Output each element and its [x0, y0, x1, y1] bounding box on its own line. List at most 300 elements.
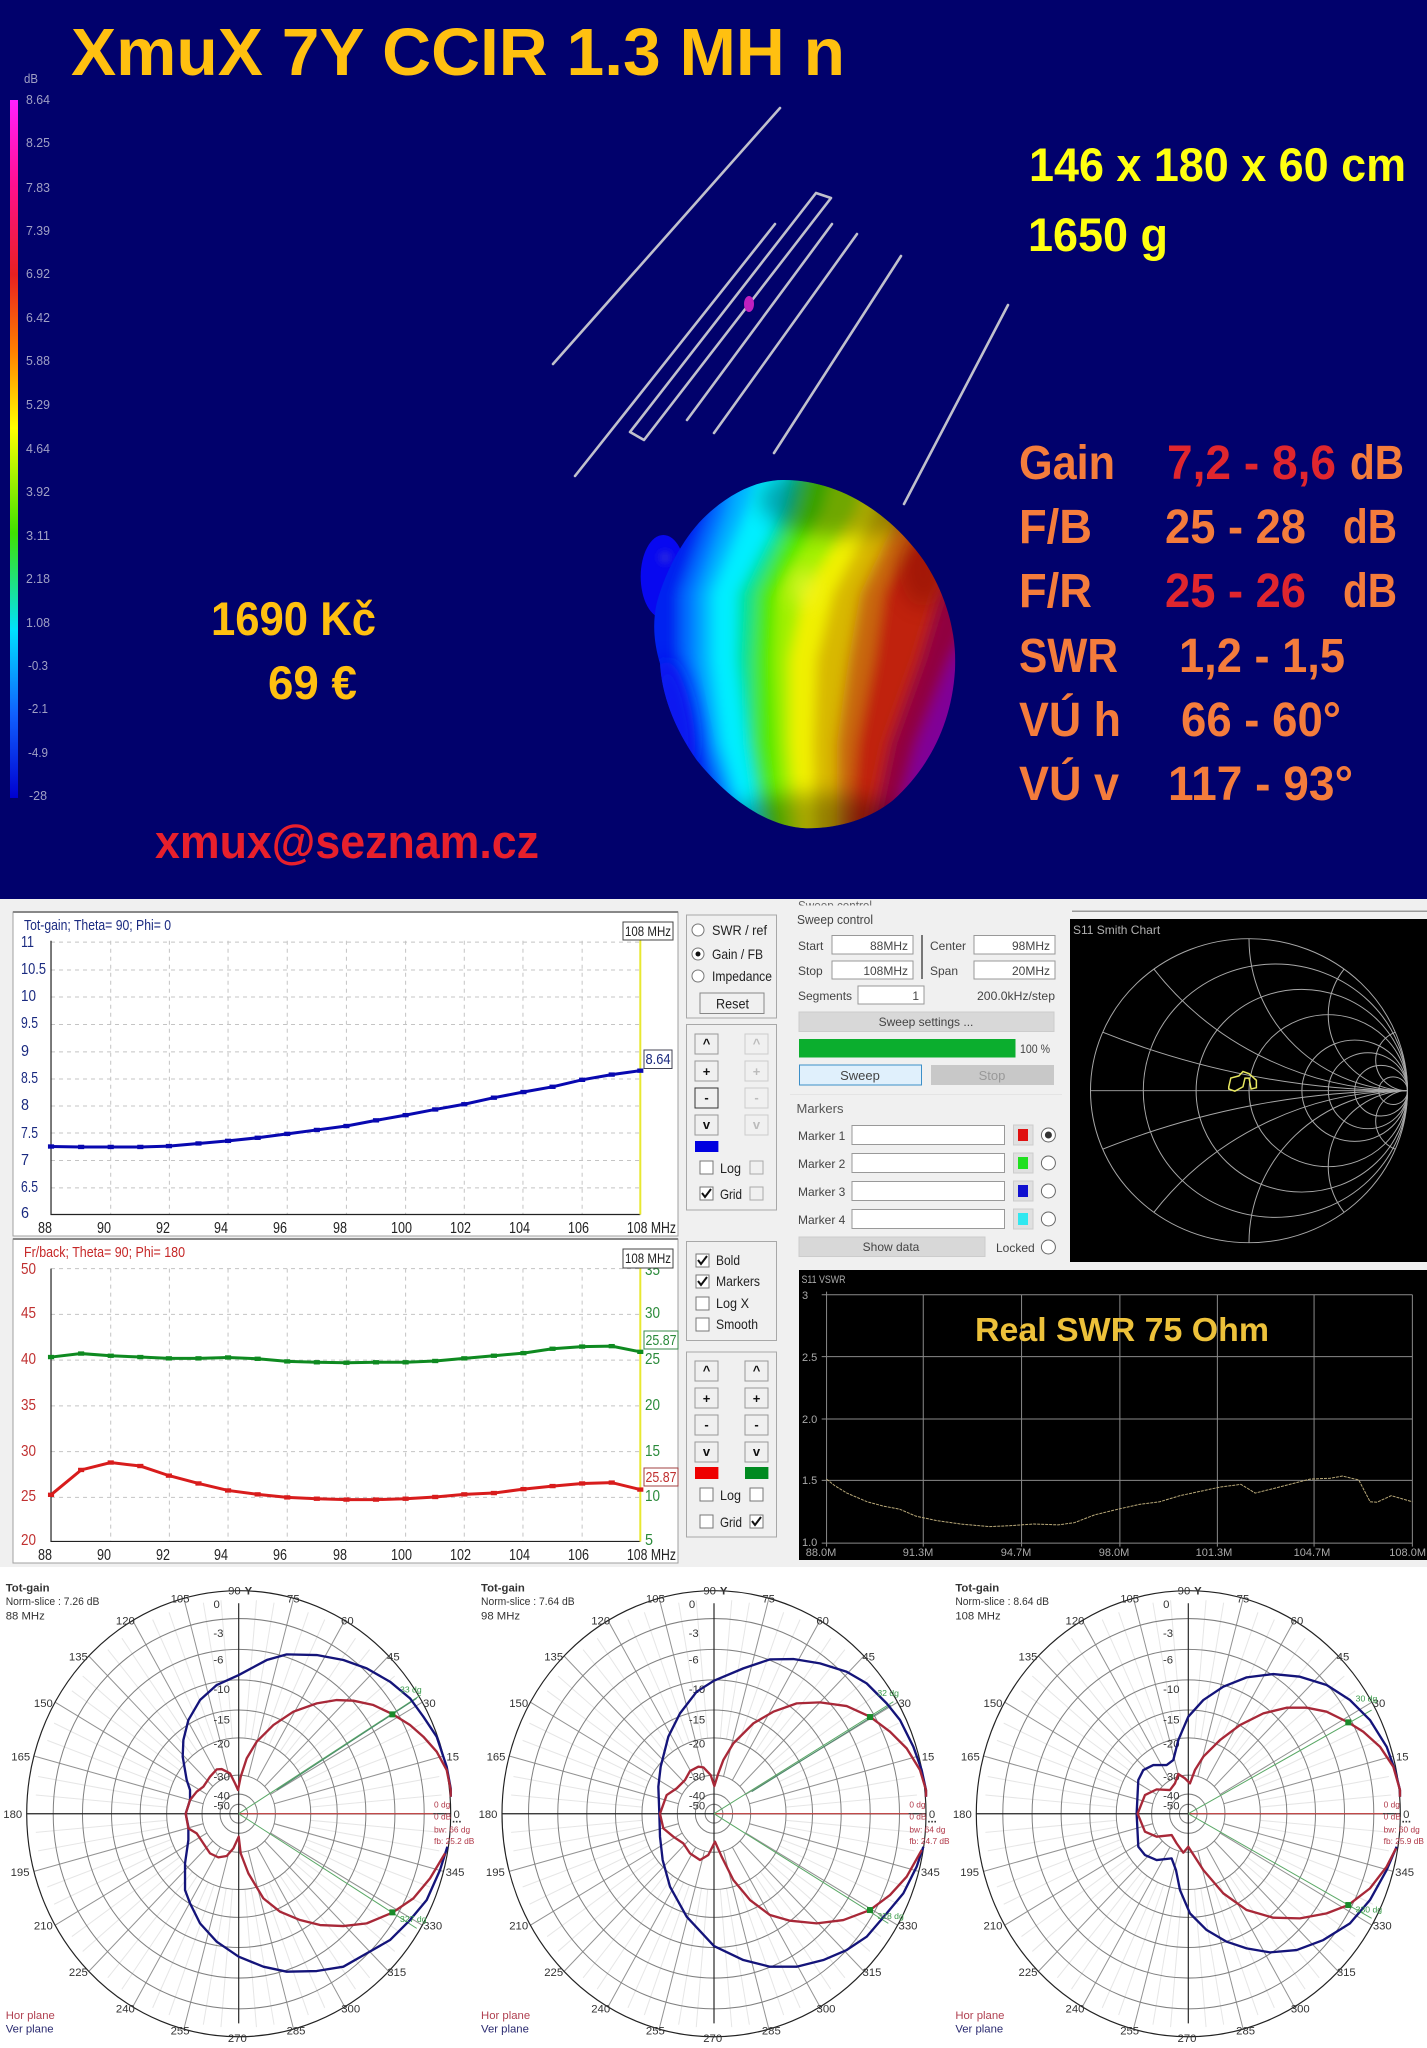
- polar angle and dB labels: Y: [1194, 1586, 1202, 1598]
- polar header: [955, 1582, 1049, 1622]
- polar angle and dB labels: 225: [544, 1967, 563, 1979]
- front/back axis labels: 25: [645, 1351, 660, 1368]
- stop button: Stop: [979, 1068, 1005, 1083]
- panel: chart mode selector: SWR / ref: [712, 922, 767, 938]
- polar angle and dB labels: 180: [3, 1809, 22, 1821]
- polar angle and dB labels: 90: [1178, 1586, 1190, 1598]
- polar angle and dB labels: -30: [214, 1771, 230, 1783]
- markers list: Marker 2: [798, 1157, 846, 1171]
- polar angle and dB labels: [953, 1586, 1414, 2045]
- polar angle and dB labels: 180: [953, 1809, 972, 1821]
- polar header: Norm-slice : 7.64 dB: [481, 1596, 575, 1608]
- polar readouts: 327 dg: [400, 1914, 427, 1924]
- show data button: [799, 1237, 985, 1256]
- polar legend: Hor plane: [6, 2010, 55, 2022]
- polar angle and dB labels: 315: [1337, 1967, 1356, 1979]
- polar angle and dB labels: 195: [960, 1867, 979, 1879]
- polar grid: [976, 1591, 1400, 2037]
- sweep range inputs: 88MHz: [870, 939, 908, 953]
- polar angle and dB labels: 345: [446, 1867, 464, 1879]
- polar header: Tot-gain: [955, 1582, 999, 1594]
- panel: plot options: Smooth: [716, 1316, 758, 1332]
- progress bar: 100 %: [1020, 1042, 1050, 1056]
- polar readouts: 0 dB: [434, 1812, 452, 1822]
- panel: polar plot 108 MHz: [953, 1582, 1424, 2045]
- polar angle and dB labels: 120: [116, 1616, 135, 1628]
- contact email: xmux@seznam.cz: [155, 815, 539, 868]
- stop button: [931, 1065, 1054, 1085]
- markers list: [790, 1094, 1062, 1229]
- panel: Smith chart: [1070, 910, 1427, 1262]
- sweep range inputs: 108MHz: [863, 964, 908, 978]
- gain title: Tot-gain; Theta= 90; Phi= 0: [24, 917, 171, 934]
- polar grid: [502, 1591, 926, 2037]
- specification table: dB: [1343, 501, 1397, 554]
- polar angle and dB labels: 330: [1373, 1921, 1392, 1933]
- polar header: 98 MHz: [481, 1610, 520, 1622]
- Smith reflection trace: [1229, 1072, 1256, 1091]
- gain axis labels: 88: [38, 1220, 52, 1237]
- polar header: Norm-slice : 8.64 dB: [955, 1596, 1049, 1608]
- polar angle and dB labels: 270: [1178, 2033, 1196, 2045]
- colour scale legend: 2.18: [26, 571, 50, 586]
- polar angle and dB labels: -3: [1163, 1628, 1173, 1640]
- polar pattern curves: [183, 1654, 451, 1972]
- title: XmuX 7Y CCIR 1.3 MH n: [71, 15, 845, 90]
- panel: plot options: [686, 1242, 776, 1340]
- gain line chart: [51, 940, 640, 1215]
- polar readouts: 0 dB: [1384, 1812, 1401, 1822]
- polar header: [481, 1582, 575, 1622]
- panel: VSWR chart: [799, 1270, 1427, 1560]
- polar readouts: bw: 64 dg: [909, 1824, 946, 1834]
- polar angle and dB labels: 315: [387, 1967, 406, 1979]
- panel: gain axis controls: Grid: [720, 1186, 742, 1202]
- polar angle and dB labels: 240: [116, 2003, 135, 2015]
- panel: front/back axis controls: v: [703, 1444, 711, 1459]
- polar angle and dB labels: 60: [1291, 1616, 1303, 1628]
- panel: chart mode selector: Gain / FB: [712, 946, 763, 962]
- feed point marker: [744, 296, 754, 312]
- front/back green value label: 25.87: [646, 1332, 676, 1349]
- polar readouts: ...: [1402, 1813, 1411, 1825]
- panel: polar plot 98 MHz: [479, 1582, 950, 2045]
- colour scale legend: 7.39: [26, 223, 50, 238]
- gain axis labels: 90: [97, 1220, 111, 1237]
- polar angle and dB labels: 120: [1066, 1616, 1084, 1628]
- sweep range inputs: Start: [798, 939, 824, 953]
- polar angle and dB labels: 75: [287, 1594, 300, 1606]
- polar angle and dB labels: 165: [11, 1751, 30, 1763]
- colour scale legend: 4.64: [26, 441, 50, 456]
- polar angle and dB labels: 165: [961, 1751, 980, 1763]
- markers list: Markers: [796, 1101, 844, 1116]
- front/back axis labels: 98: [333, 1547, 347, 1564]
- gain axis labels: 108 MHz: [627, 1220, 676, 1237]
- polar readouts: 33 dg: [400, 1685, 422, 1695]
- polar readouts: [400, 1685, 475, 1924]
- VSWR axis labels: 104.7M: [1294, 1547, 1330, 1559]
- sweep range inputs: 1: [912, 989, 919, 1003]
- gain axis labels: 96: [273, 1220, 287, 1237]
- front/back axis labels: 92: [156, 1547, 170, 1564]
- colour scale legend: 6.42: [26, 310, 50, 325]
- polar readouts: 30 dg: [1356, 1694, 1377, 1704]
- polar angle and dB labels: 270: [703, 2033, 722, 2045]
- panel: gain axis controls: -: [754, 1090, 759, 1105]
- polar angle and dB labels: 30: [898, 1698, 911, 1710]
- panel: front/back axis controls: +: [703, 1391, 711, 1406]
- polar angle and dB labels: 0: [1163, 1599, 1169, 1611]
- gain axis labels: 6.5: [21, 1179, 38, 1196]
- gain axis labels: 10.5: [21, 961, 46, 978]
- polar angle and dB labels: 300: [817, 2003, 835, 2015]
- specification table: 25 - 26: [1165, 565, 1306, 618]
- specification table: SWR: [1019, 630, 1118, 683]
- polar legend: Ver plane: [955, 2024, 1003, 2036]
- polar angle and dB labels: 45: [1337, 1651, 1349, 1663]
- polar angle and dB labels: 0: [1403, 1809, 1409, 1821]
- VSWR axis labels: 108.0M: [1389, 1547, 1426, 1559]
- front/back axis labels: 30: [645, 1305, 660, 1322]
- front/back axis labels: 94: [214, 1547, 228, 1564]
- gain axis labels: 7.5: [21, 1125, 38, 1142]
- VSWR axis labels: 88.0M: [806, 1547, 836, 1559]
- price: [211, 592, 376, 709]
- colour scale legend: [10, 71, 50, 803]
- polar angle and dB labels: 0: [454, 1809, 460, 1821]
- colour scale legend: 3.11: [26, 528, 50, 543]
- polar angle and dB labels: 0: [214, 1599, 220, 1611]
- polar angle and dB labels: -50: [1163, 1801, 1179, 1813]
- colour scale legend: -4.9: [28, 745, 48, 760]
- colour scale legend: 5.29: [26, 397, 50, 412]
- front/back axis labels: 90: [97, 1547, 111, 1564]
- dimensions and weight: 1650 g: [1028, 208, 1168, 261]
- gain axis labels: 92: [156, 1220, 170, 1237]
- polar angle and dB labels: 105: [646, 1594, 665, 1606]
- front/back axis labels: 30: [21, 1443, 36, 1460]
- specification table: Gain: [1019, 437, 1115, 490]
- polar header: 108 MHz: [955, 1610, 1001, 1622]
- gain axis labels: 102: [450, 1220, 471, 1237]
- front/back axis labels: 35: [21, 1397, 36, 1414]
- colour scale legend: -28: [29, 788, 47, 803]
- polar angle and dB labels: 105: [1120, 1594, 1139, 1606]
- gain axis labels: 7: [21, 1152, 29, 1169]
- specification table: 66 - 60°: [1181, 694, 1341, 747]
- markers list: Marker 4: [798, 1213, 846, 1227]
- Smith grid: [1090, 939, 1408, 1243]
- polar angle and dB labels: [479, 1586, 940, 2045]
- front/back axis labels: 106: [568, 1547, 589, 1564]
- polar angle and dB labels: 165: [487, 1751, 505, 1763]
- polar angle and dB labels: 15: [1396, 1751, 1409, 1763]
- front/back axis labels: 108 MHz: [627, 1547, 676, 1564]
- polar angle and dB labels: 150: [509, 1698, 528, 1710]
- locked toggle: [996, 1240, 1055, 1255]
- sweep range inputs: Span: [930, 964, 958, 978]
- panel: front/back axis controls: [686, 1352, 776, 1537]
- sweep heading: Sweep control: [797, 912, 873, 927]
- polar angle and dB labels: 135: [69, 1651, 88, 1663]
- specification table: 1,2 - 1,5: [1179, 630, 1345, 683]
- polar legend: Hor plane: [481, 2010, 530, 2022]
- markers list: Marker 1: [798, 1129, 846, 1143]
- polar angle and dB labels: 210: [509, 1921, 528, 1933]
- polar angle and dB labels: 255: [646, 2025, 665, 2037]
- panel: front/back axis controls: ^: [753, 1363, 761, 1378]
- polar angle and dB labels: -10: [214, 1684, 230, 1696]
- specification table: VÚ h: [1019, 692, 1121, 747]
- panel: gain axis controls: ^: [703, 1036, 711, 1051]
- polar angle and dB labels: 30: [423, 1698, 436, 1710]
- panel: sweep control: Sweep control: [798, 898, 872, 913]
- specification table: 25 - 28: [1165, 501, 1306, 554]
- panel: gain axis controls: Log: [720, 1160, 741, 1176]
- VSWR axis labels: 1.0: [802, 1537, 817, 1549]
- polar angle and dB labels: -30: [1163, 1771, 1179, 1783]
- gain axis labels: 8.5: [21, 1070, 38, 1087]
- polar readouts: 0 dB: [909, 1812, 927, 1822]
- polar readouts: [1356, 1694, 1424, 1914]
- gain axis labels: 6: [21, 1205, 29, 1222]
- front/back axis labels: 88: [38, 1547, 52, 1564]
- sweep range inputs: Center: [930, 939, 966, 953]
- colour scale legend: 5.88: [26, 353, 50, 368]
- panel: gain axis controls: [686, 1024, 776, 1210]
- polar angle and dB labels: -15: [214, 1715, 230, 1727]
- panel: front/back axis controls: Grid: [720, 1514, 742, 1530]
- polar angle and dB labels: 0: [929, 1809, 935, 1821]
- front/back axis labels: 50: [21, 1261, 36, 1278]
- polar angle and dB labels: 15: [922, 1751, 934, 1763]
- polar angle and dB labels: 135: [544, 1651, 563, 1663]
- colour scale legend: dB: [24, 71, 38, 86]
- sweep range inputs: 20MHz: [1012, 964, 1050, 978]
- polar angle and dB labels: 330: [899, 1921, 917, 1933]
- polar angle and dB labels: 300: [341, 2003, 360, 2015]
- polar angle and dB labels: -3: [213, 1628, 223, 1640]
- polar angle and dB labels: 45: [387, 1651, 400, 1663]
- panel: front/back chart: [13, 1238, 678, 1564]
- panel: chart mode selector: [686, 915, 776, 1018]
- polar readouts: fb: 24.7 dB: [909, 1836, 950, 1846]
- colour scale legend: 8.25: [26, 135, 50, 150]
- gain axis labels: 104: [509, 1220, 530, 1237]
- panel: plot options: Markers: [716, 1273, 760, 1289]
- dimensions and weight: [1028, 138, 1406, 261]
- sweep range inputs: Segments: [798, 989, 852, 1003]
- sweep range inputs: Stop: [798, 964, 823, 978]
- panel: gain axis controls: v: [753, 1117, 761, 1132]
- gain axis labels: 98: [333, 1220, 347, 1237]
- polar angle and dB labels: -20: [1163, 1739, 1179, 1751]
- panel: sweep control: [790, 898, 1062, 1256]
- back lobe: [641, 535, 686, 618]
- polar angle and dB labels: 15: [446, 1751, 459, 1763]
- polar angle and dB labels: 195: [11, 1867, 29, 1879]
- polar angle and dB labels: -10: [1163, 1684, 1179, 1696]
- polar angle and dB labels: Y: [720, 1586, 728, 1598]
- sweep settings button: [799, 1012, 1054, 1032]
- specification table: dB: [1350, 437, 1404, 490]
- polar angle and dB labels: -3: [689, 1628, 699, 1640]
- front/back axis labels: 35: [645, 1262, 660, 1279]
- front/back axis labels: 10: [645, 1488, 660, 1505]
- polar angle and dB labels: -6: [689, 1655, 699, 1667]
- polar readouts: ...: [927, 1813, 937, 1825]
- panel: 3D antenna model header: [0, 0, 1427, 899]
- gain axis labels: 10: [21, 988, 36, 1005]
- polar legend: Ver plane: [6, 2024, 54, 2036]
- polar grid: [27, 1591, 451, 2037]
- specification table: 117 - 93°: [1168, 758, 1353, 811]
- polar angle and dB labels: 0: [689, 1599, 695, 1611]
- specification table: [1019, 437, 1404, 811]
- polar readouts: 0 dg: [1384, 1799, 1400, 1809]
- VSWR axis labels: 101.3M: [1196, 1547, 1232, 1559]
- polar angle and dB labels: 345: [1395, 1867, 1414, 1879]
- polar readouts: ...: [452, 1813, 461, 1825]
- polar angle and dB labels: 285: [1236, 2025, 1255, 2037]
- polar angle and dB labels: 210: [34, 1921, 53, 1933]
- gain axis labels: 106: [568, 1220, 589, 1237]
- polar angle and dB labels: 75: [1237, 1594, 1249, 1606]
- colour scale legend: 1.08: [26, 615, 50, 630]
- polar angle and dB labels: 105: [171, 1594, 189, 1606]
- front/back axis labels: 25: [21, 1488, 36, 1505]
- polar legend: Hor plane: [955, 2010, 1004, 2022]
- progress bar: [799, 1039, 1050, 1058]
- polar angle and dB labels: -40: [1163, 1790, 1179, 1802]
- gain axis labels: 9: [21, 1043, 29, 1060]
- polar header: 88 MHz: [6, 1610, 45, 1622]
- panel: gain chart: [13, 911, 678, 1237]
- front/back axis labels: 45: [21, 1305, 36, 1322]
- front/back axis labels: 96: [273, 1547, 287, 1564]
- polar readouts: fb: 25.9 dB: [1384, 1836, 1424, 1846]
- polar angle and dB labels: -20: [689, 1739, 705, 1751]
- polar angle and dB labels: 60: [816, 1616, 829, 1628]
- front/back axis labels: 104: [509, 1547, 530, 1564]
- colour scale legend: 6.92: [26, 266, 50, 281]
- polar angle and dB labels: 60: [341, 1616, 354, 1628]
- panel: gain axis controls: -: [704, 1090, 709, 1105]
- front/back axis labels: 20: [21, 1532, 36, 1549]
- price: 1690 Kč: [211, 592, 376, 645]
- 3D radiation pattern balloon: [640, 480, 956, 828]
- polar angle and dB labels: 75: [762, 1594, 775, 1606]
- polar legend: [6, 2010, 55, 2036]
- polar readouts: [877, 1688, 950, 1921]
- polar angle and dB labels: -15: [689, 1715, 705, 1727]
- VSWR axis labels: 1.5: [802, 1475, 817, 1487]
- panel: gain axis controls: +: [703, 1064, 711, 1079]
- front/back axis labels: 20: [645, 1397, 660, 1414]
- polar angle and dB labels: 240: [591, 2003, 610, 2015]
- VSWR trace: [827, 1476, 1412, 1527]
- polar angle and dB labels: -50: [689, 1801, 705, 1813]
- sweep settings button: Sweep settings ...: [879, 1015, 973, 1029]
- front/back axis labels: 102: [450, 1547, 471, 1564]
- polar angle and dB labels: 135: [1019, 1651, 1037, 1663]
- panel: front/back axis controls: -: [704, 1417, 709, 1432]
- polar legend: Ver plane: [481, 2024, 529, 2036]
- colour scale legend: -0.3: [28, 658, 48, 673]
- polar angle and dB labels: 255: [1120, 2025, 1139, 2037]
- panel: polar plot 88 MHz: [3, 1582, 475, 2045]
- sweep button: [800, 1065, 922, 1085]
- polar header: Tot-gain: [6, 1582, 50, 1594]
- gain axis labels: 94: [214, 1220, 228, 1237]
- VSWR axis labels: 94.7M: [1001, 1547, 1031, 1559]
- polar legend: [481, 2010, 530, 2036]
- polar angle and dB labels: 285: [762, 2025, 781, 2037]
- colour scale legend: 7.83: [26, 180, 50, 195]
- panel: front/back axis controls: +: [753, 1391, 761, 1406]
- panel: front/back axis controls: ^: [703, 1363, 711, 1378]
- front/back line chart: [51, 1268, 640, 1541]
- polar angle and dB labels: 225: [69, 1967, 88, 1979]
- colour scale legend: 3.92: [26, 484, 50, 499]
- VSWR axis labels: 98.0M: [1099, 1547, 1129, 1559]
- panel: chart mode selector: Impedance: [712, 968, 772, 984]
- polar angle and dB labels: Y: [245, 1586, 253, 1598]
- polar pattern curves: [658, 1659, 926, 1967]
- dimensions and weight: 146 x 180 x 60 cm: [1029, 138, 1406, 191]
- polar pattern curves: [1137, 1674, 1400, 1952]
- colour scale legend: 8.64: [26, 92, 50, 107]
- polar angle and dB labels: -15: [1163, 1715, 1179, 1727]
- specification table: F/R: [1019, 565, 1092, 618]
- specification table: F/B: [1019, 501, 1092, 554]
- locked toggle: Locked: [996, 1241, 1035, 1255]
- colour scale legend: -2.1: [28, 701, 48, 716]
- polar angle and dB labels: 285: [287, 2025, 305, 2037]
- polar readouts: 330 dg: [1356, 1904, 1382, 1914]
- polar angle and dB labels: -6: [1163, 1655, 1173, 1667]
- polar angle and dB labels: 270: [228, 2033, 247, 2045]
- gain axis labels: 100: [391, 1220, 412, 1237]
- front/back axis labels: 15: [645, 1443, 660, 1460]
- gain axis labels: 9.5: [21, 1015, 38, 1032]
- antenna elements: [553, 108, 1008, 504]
- sweep button: Sweep: [840, 1068, 880, 1083]
- price: 69 €: [268, 656, 357, 709]
- panel: plot options: Log X: [716, 1295, 750, 1311]
- polar angle and dB labels: 150: [34, 1698, 53, 1710]
- front/back axis labels: 100: [391, 1547, 412, 1564]
- specification table: VÚ v: [1019, 756, 1119, 811]
- frequency cursor label: 108 MHz: [625, 923, 671, 939]
- polar angle and dB labels: -30: [689, 1771, 705, 1783]
- polar angle and dB labels: -40: [689, 1790, 705, 1802]
- panel: front/back axis controls: -: [754, 1417, 759, 1432]
- front/back red value label: 25.87: [646, 1469, 676, 1486]
- VSWR axis labels: 2.5: [802, 1352, 817, 1364]
- show data button: Show data: [863, 1240, 920, 1254]
- gain axis labels: 11: [21, 934, 34, 951]
- polar readouts: 0 dg: [434, 1799, 451, 1809]
- polar readouts: 0 dg: [909, 1799, 926, 1809]
- polar angle and dB labels: 30: [1373, 1698, 1385, 1710]
- VSWR axis labels: [802, 1290, 1426, 1559]
- panel: chart mode selector: Reset: [716, 996, 749, 1012]
- polar angle and dB labels: 210: [984, 1921, 1002, 1933]
- VSWR axis labels: 91.3M: [903, 1547, 933, 1559]
- VSWR title: S11 VSWR: [802, 1274, 846, 1286]
